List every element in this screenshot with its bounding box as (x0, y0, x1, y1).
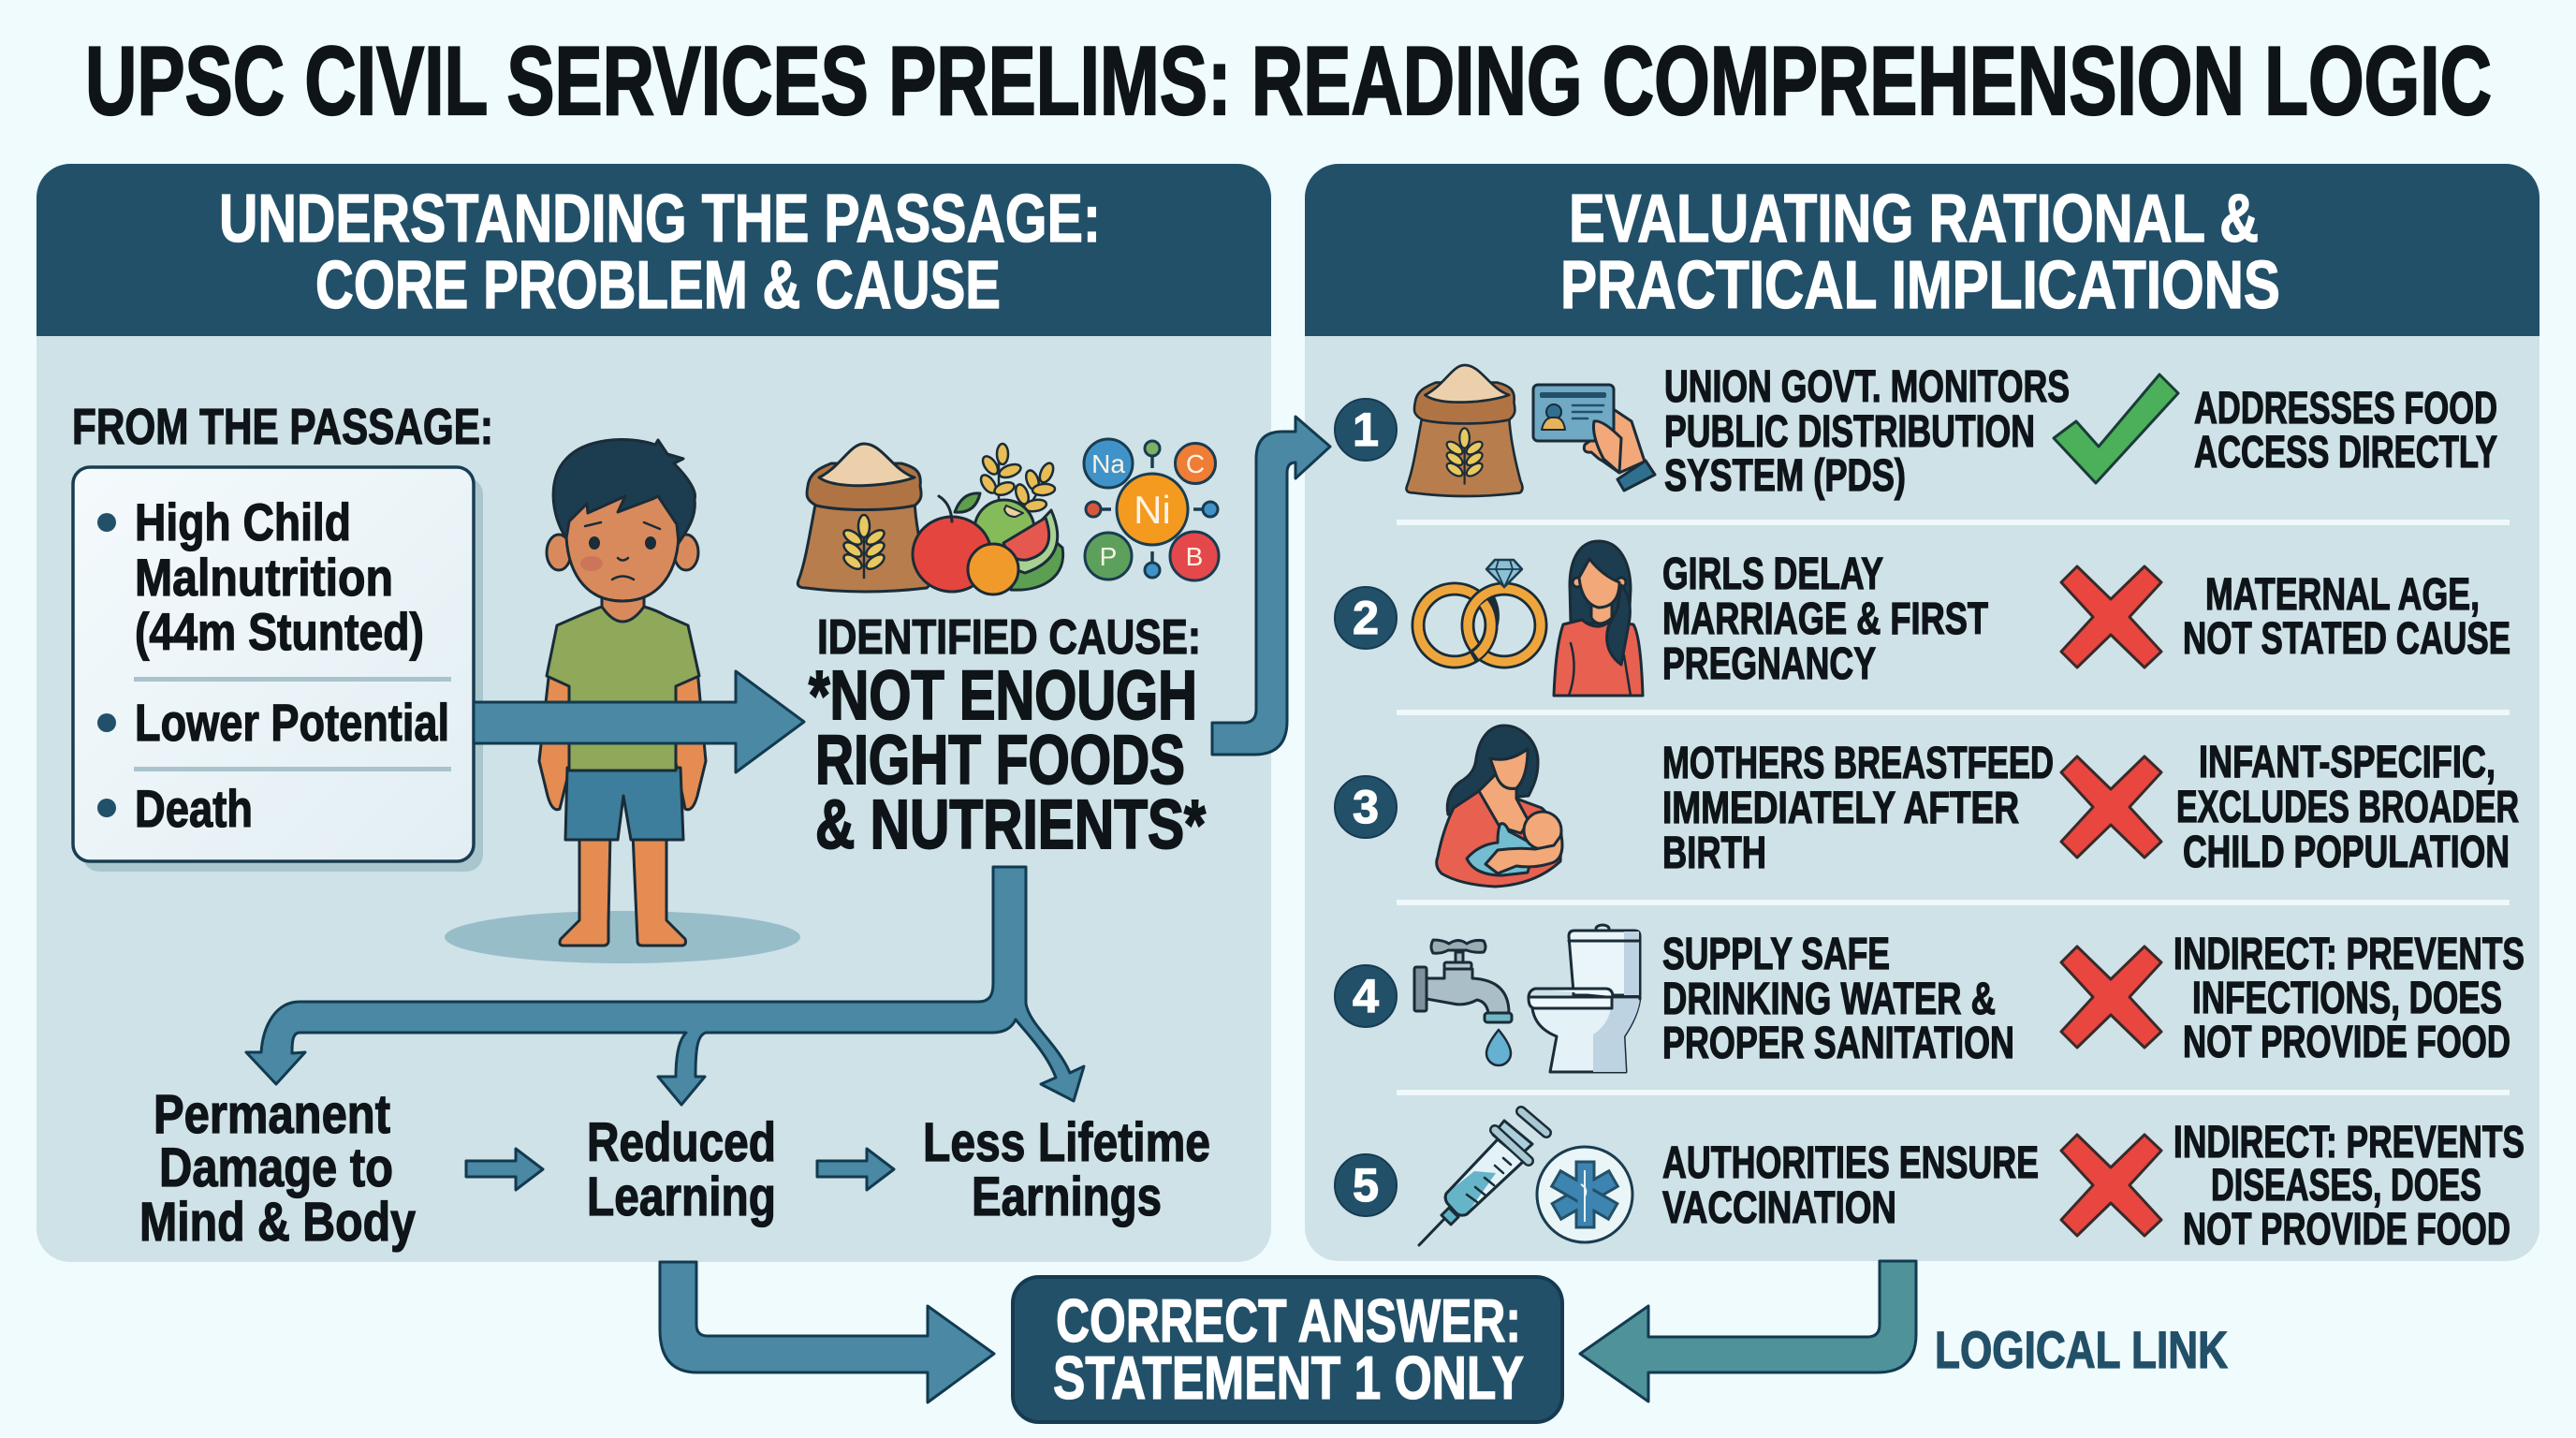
statement 5: VACCINATION (1662, 1183, 1896, 1233)
verdict 5 (2174, 1118, 2525, 1255)
statement 1: SYSTEM (PDS) (1664, 451, 1906, 501)
consequence: permanent damage: Permanent (154, 1084, 390, 1145)
number 3: 3 (1353, 781, 1379, 833)
statement 2: GIRLS DELAY (1662, 550, 1883, 599)
right panel header: PRACTICAL IMPLICATIONS (1560, 248, 2280, 323)
icon: nutrients: P (1100, 542, 1117, 571)
arrow: learning to earnings (817, 1149, 894, 1190)
consequence: reduced learning: Learning (587, 1167, 776, 1227)
statement 1 (1664, 362, 2070, 501)
icon: fruit and wheat (913, 444, 1063, 594)
number 1 (1335, 399, 1397, 461)
icon: syringe (1419, 1111, 1546, 1245)
icon: nutrients (1084, 439, 1219, 580)
number 1: 1 (1353, 404, 1379, 456)
statement 4: DRINKING WATER & (1662, 975, 1996, 1024)
arrow: cause branches to consequences (246, 867, 1084, 1105)
statement 5: AUTHORITIES ENSURE (1662, 1138, 2039, 1188)
card: passage facts: High Child (135, 492, 351, 551)
from the passage heading: FROM THE PASSAGE: (72, 399, 493, 455)
answer box (1013, 1277, 1562, 1422)
statement 2: PREGNANCY (1662, 639, 1876, 689)
statement 3 (1662, 739, 2054, 878)
identified cause (809, 610, 1206, 863)
left panel header: CORE PROBLEM & CAUSE (315, 248, 1001, 323)
icon: red cross (2061, 1135, 2161, 1236)
statement 5 (1662, 1138, 2039, 1233)
consequence: permanent damage (139, 1084, 416, 1253)
right panel header: EVALUATING RATIONAL & (1569, 182, 2259, 257)
row 2: delay marriage (1335, 541, 2510, 696)
statement 4: SUPPLY SAFE (1662, 930, 1890, 979)
logical link label: LOGICAL LINK (1935, 1320, 2228, 1379)
statement 3: BIRTH (1662, 829, 1766, 878)
icon: grain sack (798, 444, 929, 592)
arrow: damage to learning (466, 1149, 543, 1190)
card: passage facts (73, 467, 483, 872)
right panel header (1305, 164, 2539, 336)
icon: nutrients: B (1186, 542, 1203, 571)
arrow: right panel to answer (1580, 1261, 1916, 1401)
icon: nutrients: Ni (1134, 488, 1171, 532)
card: passage facts: (44m Stunted) (135, 602, 424, 661)
statement 4 (1662, 930, 2014, 1068)
row 1: public distribution system (1335, 362, 2497, 501)
number 4 (1335, 965, 1397, 1027)
number 5: 5 (1353, 1159, 1379, 1211)
statement 1: PUBLIC DISTRIBUTION (1664, 407, 2035, 457)
icon: medical star (1537, 1147, 1632, 1242)
identified cause: *NOT ENOUGH (809, 656, 1197, 734)
number 3 (1335, 776, 1397, 838)
row 3: breastfeeding (1335, 726, 2519, 887)
answer box: CORRECT ANSWER: (1056, 1286, 1521, 1355)
statement 2 (1662, 550, 1988, 689)
icon: green check (2054, 374, 2178, 483)
number 2 (1335, 587, 1397, 649)
number 4: 4 (1353, 970, 1379, 1022)
consequence: permanent damage: Mind & Body (139, 1192, 416, 1253)
consequence: less lifetime earnings: Less Lifetime (923, 1112, 1210, 1173)
row 4: water and sanitation (1335, 925, 2525, 1072)
consequence: less lifetime earnings (923, 1112, 1210, 1227)
icon: young woman (1554, 541, 1643, 696)
verdict 4 (2174, 930, 2525, 1067)
icon: red cross (2061, 566, 2161, 668)
icon: child (445, 440, 800, 963)
icon: red cross (2061, 946, 2161, 1048)
left panel header (37, 164, 1271, 336)
icon: nutrients: C (1186, 449, 1205, 478)
icon: tap with drop (1414, 940, 1512, 1065)
statement 3: IMMEDIATELY AFTER (1662, 784, 2019, 833)
icon: grain sack and ration card (1406, 365, 1655, 496)
identified cause: & NUTRIENTS* (815, 785, 1206, 863)
arrow: passage to cause (474, 671, 804, 772)
statement 2: MARRIAGE & FIRST (1662, 594, 1988, 644)
icon: wedding rings (1418, 560, 1541, 662)
panel: understanding the passage (37, 164, 1271, 1262)
icon: toilet (1529, 925, 1640, 1072)
consequence: less lifetime earnings: Earnings (972, 1167, 1162, 1227)
verdict 3 (2176, 738, 2519, 877)
icon: red cross (2061, 756, 2161, 858)
verdict 2 (2183, 570, 2510, 664)
consequence: reduced learning: Reduced (587, 1112, 776, 1173)
verdict 1 (2194, 384, 2497, 477)
verdict 2: MATERNAL AGE, (2205, 570, 2480, 620)
card: passage facts: Death (135, 779, 253, 838)
consequence: permanent damage: Damage to (159, 1137, 393, 1198)
icon: nutrients: Na (1091, 449, 1125, 478)
consequence: reduced learning (587, 1112, 776, 1227)
card: passage facts: Lower Potential (135, 693, 449, 752)
arrow: cause to implications (1212, 417, 1330, 755)
statement 3: MOTHERS BREASTFEED (1662, 739, 2054, 788)
statement 1: UNION GOVT. MONITORS (1664, 362, 2070, 412)
number 5 (1335, 1154, 1397, 1216)
answer box: STATEMENT 1 ONLY (1053, 1343, 1524, 1412)
identified cause: IDENTIFIED CAUSE: (817, 610, 1201, 665)
card: passage facts: Malnutrition (135, 548, 393, 607)
identified cause: RIGHT FOODS (815, 721, 1185, 799)
panel: evaluating implications (1305, 164, 2539, 1261)
row 5: vaccination (1335, 1111, 2525, 1255)
arrow: left panel to answer (660, 1262, 994, 1402)
statement 4: PROPER SANITATION (1662, 1019, 2014, 1068)
icon: mother and infant (1437, 726, 1562, 887)
number 2: 2 (1353, 592, 1379, 644)
left panel header: UNDERSTANDING THE PASSAGE: (219, 182, 1101, 257)
